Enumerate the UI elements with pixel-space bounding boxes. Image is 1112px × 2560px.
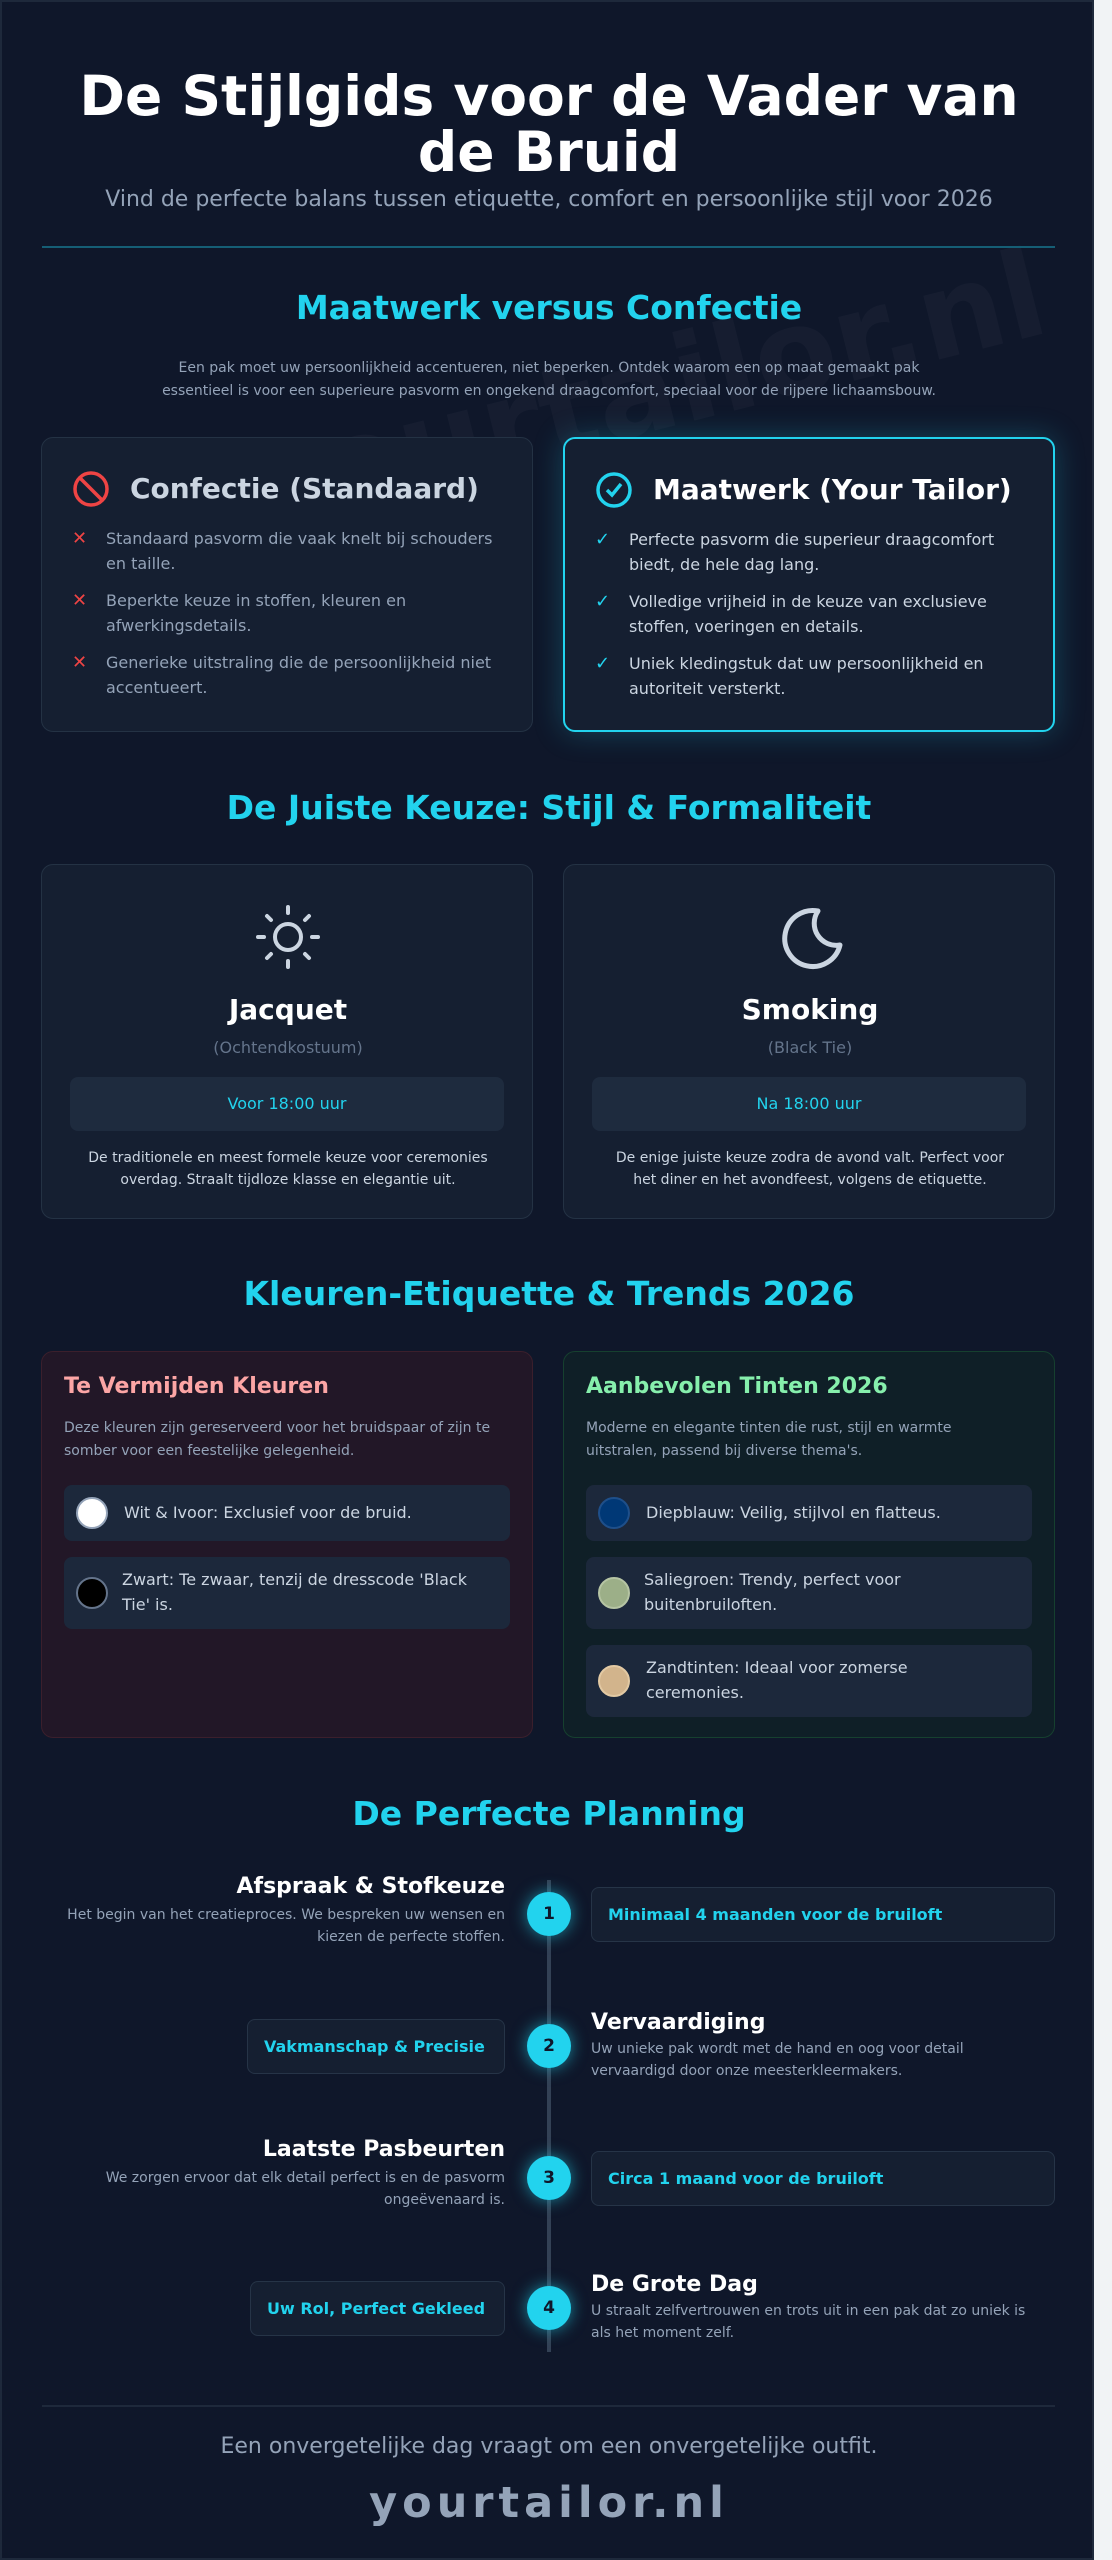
step 1: Afspraak & Stofkeuze [236,1874,505,1899]
step 3: 3 [543,2168,555,2188]
step 2: Uw unieke pak wordt met de hand en oog voor detail vervaardigd door onze meesterkleermakers. [591,2041,964,2079]
step 2: Vervaardiging [591,2010,765,2035]
panel: maatwerk [563,437,1055,732]
intro text: Een pak moet uw persoonlijkheid accentueren, niet beperken. Ontdek waarom een op maat gemaakt pak essentieel is voor een superieure pasvorm en ongekend draagcomfort, speciaal voor de rijpere lichaamsbouw. [162,360,936,399]
heading: Te Vermijden Kleuren [64,1374,329,1399]
panel: te vermijden kleuren [41,1351,533,1738]
pill [70,1077,504,1131]
heading: De Juiste Keuze: De Juiste Keuze: Stijl & Formaliteit [227,788,871,827]
panel: confectie: Beperkte keuze in stoffen, kleuren en afwerkingsdetails. [106,591,406,635]
step 4: De Grote Dag [591,2272,758,2297]
subtitle: Vind de perfecte balans tussen etiquette, comfort en persoonlijke stijl voor 2026 [105,187,993,212]
step 3: Circa 1 maand voor de bruiloft [608,2169,883,2188]
icon: check circle [596,472,632,508]
step 2 [247,2010,964,2079]
item: zwart [64,1557,510,1629]
item: diepblauw [586,1485,1032,1541]
panel: aanbevolen tinten [563,1351,1055,1738]
step 1 [67,1874,1055,1946]
step 4: Uw Rol, Perfect Gekleed [267,2299,485,2318]
bullets: ✓ [595,529,610,550]
step 2: 2 [543,2036,555,2056]
name: Smoking [742,993,878,1026]
item: wit [64,1485,510,1541]
timeline [547,1880,551,2352]
item: diepblauw: Diepblauw: Veilig, stijlvol en flatteus. [646,1503,941,1522]
heading: Maatwerk (Your Tailor) [653,473,1012,506]
title: De Stijlgids voor de Vader van de Bruid [79,64,1019,184]
heading: Confectie (Standaard) [130,472,479,505]
step 4: U straalt zelfvertrouwen en trots uit in een pak dat zo uniek is als het moment zelf. [591,2303,1025,2341]
item: zwart: Zwart: Te zwaar, tenzij de dresscode 'Black Tie' is. [122,1570,467,1614]
panel: maatwerk: Volledige vrijheid in de keuze van exclusieve stoffen, voeringen en details. [629,592,987,636]
step 2: Vakmanschap & Precisie [264,2037,485,2056]
heading: Maatwerk versus Confectie: Maatwerk versus Confectie [296,288,802,327]
item: saliegroen: Saliegroen: Trendy, perfect voor buitenbruiloften. [644,1570,901,1614]
description: De enige juiste keuze zodra de avond valt. Perfect voor het diner en het avondfeest, volgens de etiquette. [616,1150,1004,1188]
panel: jacquet: (Ochtendkostuum) [213,1038,363,1057]
bullets: Standaard pasvorm die vaak knelt bij schouders en taille. [106,529,492,573]
item: zandtinten: Zandtinten: Ideaal voor zomerse ceremonies. [646,1658,908,1702]
step 3: Laatste Pasbeurten [263,2137,505,2162]
item: saliegroen [586,1557,1032,1629]
step 1: Het begin van het creatieproces. We bespreken uw wensen en kiezen de perfecte stoffen. [67,1907,505,1945]
icon: moon [782,908,842,970]
pill [592,1077,1026,1131]
panel: confectie [41,437,533,732]
panel: te vermijden kleuren: Deze kleuren zijn gereserveerd voor het bruidspaar of zijn te somber voor een feestelijke gelegenheid. [64,1420,490,1459]
step 1: 1 [543,1904,555,1924]
pill: Voor 18:00 uur [228,1094,346,1113]
step 4 [250,2272,1025,2341]
pill: Na 18:00 uur [757,1094,861,1113]
panel: confectie: Generieke uitstraling die de persoonlijkheid niet accentueert. [106,653,491,697]
heading: Aanbevolen Tinten 2026 [586,1374,888,1399]
step 4: 4 [543,2298,555,2318]
panel: maatwerk: ✓ [595,653,610,674]
icon: sun [256,905,320,969]
panel: maatwerk: Uniek kledingstuk dat uw persoonlijkheid en autoriteit versterkt. [629,654,984,698]
step 1: Minimaal 4 maanden voor de bruiloft [608,1905,942,1924]
step 3: We zorgen ervoor dat elk detail perfect is en de pasvorm ongeëvenaard is. [106,2170,505,2208]
panel: maatwerk: ✓ [595,591,610,612]
panel: aanbevolen tinten: Moderne en elegante tinten die rust, stijl en warmte uitstralen, passend bij diverse thema's. [586,1420,951,1459]
footer tagline: Een onvergetelijke dag vraagt om een onvergetelijke outfit. [220,2434,877,2459]
description: De traditionele en meest formele keuze voor ceremonies overdag. Straalt tijdloze klasse en elegantie uit. [88,1150,488,1188]
panel: smoking: (Black Tie) [768,1038,852,1057]
icon: ban [73,471,109,507]
panel: confectie: ✕ [72,652,87,673]
item: zandtinten [586,1645,1032,1717]
watermark: yourtailor.nl [227,225,1059,558]
panel: jacquet [41,864,533,1219]
item: wit: Wit & Ivoor: Exclusief voor de bruid. [124,1503,412,1522]
heading: De Perfecte Planning: De Perfecte Planning [352,1794,746,1833]
heading: Kleuren-Etiquette: Kleuren-Etiquette & Trends 2026 [243,1274,855,1313]
panel: confectie: ✕ [72,590,87,611]
name: Jacquet [229,993,347,1026]
footer logo: yourtailor.nl [369,2478,729,2528]
step 3 [106,2137,1055,2210]
bullets: ✕ [72,528,87,549]
panel: smoking [563,864,1055,1219]
bullets: Perfecte pasvorm die superieur draagcomfort biedt, de hele dag lang. [629,530,994,574]
